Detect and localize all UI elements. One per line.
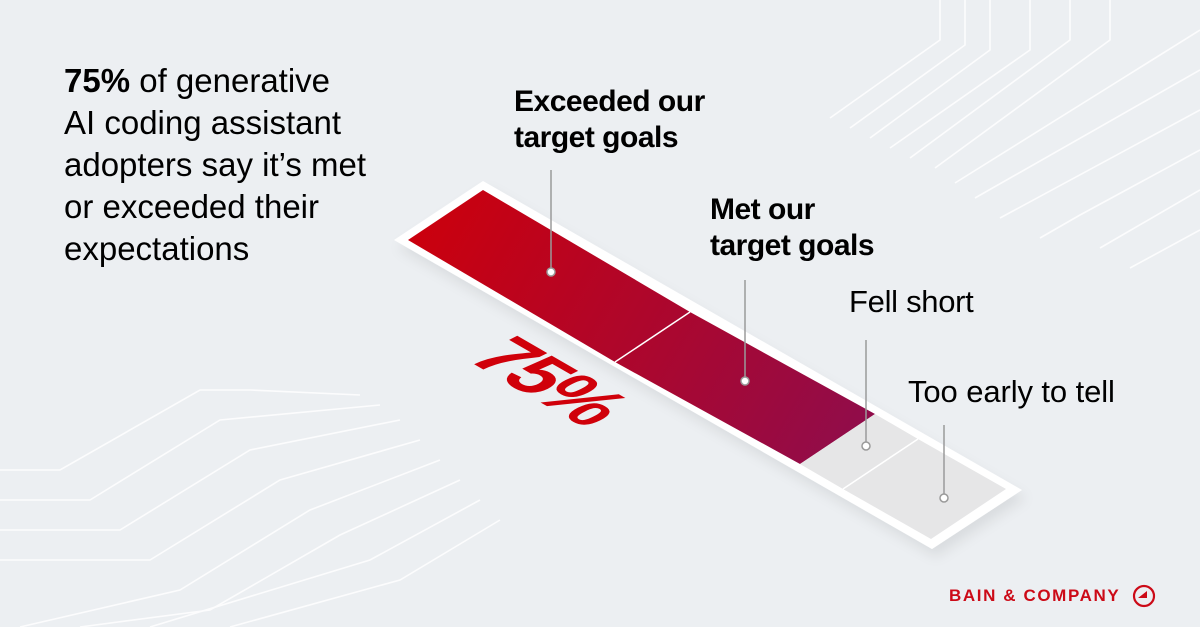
title text block: 75% of generative xyxy=(64,62,330,99)
label: met: Met our xyxy=(710,193,815,226)
label: exceeded: target goals xyxy=(514,121,678,154)
title text block: AI coding assistant xyxy=(64,104,341,141)
label: exceeded xyxy=(514,85,705,154)
segment: met xyxy=(615,312,875,464)
bar frame xyxy=(394,181,1022,549)
label: met xyxy=(710,193,874,262)
label: exceeded: Exceeded our xyxy=(514,85,705,118)
label: too early: Too early to tell xyxy=(908,374,1115,409)
segment: fell short xyxy=(800,414,918,489)
label: fell short: Fell short xyxy=(849,284,973,319)
logo xyxy=(949,584,1156,608)
big 75% label: 75% xyxy=(449,327,650,436)
title text block xyxy=(64,62,366,267)
label: met: target goals xyxy=(710,229,874,262)
leader lines xyxy=(547,170,948,502)
logo: BAIN & COMPANY xyxy=(949,586,1120,605)
title text block: expectations xyxy=(64,230,249,267)
title text block: or exceeded their xyxy=(64,188,319,225)
segment: too early xyxy=(843,439,1006,539)
segment: exceeded xyxy=(408,190,690,362)
title text block: adopters say it’s met xyxy=(64,146,366,183)
